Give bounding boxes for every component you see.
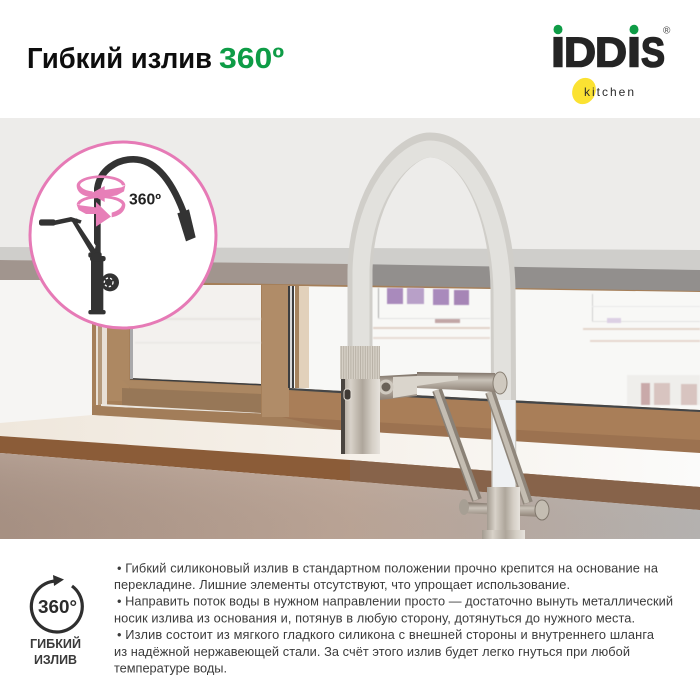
- icon: 360 flexible spout badge: [30, 575, 82, 667]
- faucet nozzle body: [341, 378, 380, 454]
- photo: kitchen window with faucet: [0, 118, 700, 539]
- embrasure: [96, 281, 107, 405]
- purple windows: [387, 288, 403, 304]
- logo wordmark: I: [551, 28, 565, 76]
- registered mark: ®: [663, 26, 671, 36]
- description text: носик излива из основания и, потянув в любую сторону, дотянуться до нужного места.: [114, 610, 635, 626]
- logo wordmark: D: [564, 28, 596, 76]
- right glass: [289, 286, 700, 410]
- distant buildings: [373, 288, 700, 405]
- circular arrow: [31, 581, 82, 632]
- right sash: [289, 388, 700, 412]
- description text: • Излив состоит из мягкого гладкого силикона с внешней стороны и внутреннего шланга: [117, 627, 655, 642]
- title: Гибкий излив: [27, 43, 212, 75]
- left sash: [107, 281, 129, 401]
- right building: [627, 375, 700, 405]
- logo wordmark: [551, 28, 665, 76]
- logo dot left: [554, 25, 562, 34]
- countertop: [0, 415, 700, 487]
- window frame wood: [92, 281, 700, 454]
- left glass: [130, 285, 261, 384]
- faucet base: [487, 487, 520, 531]
- mullion: [262, 285, 289, 417]
- nozzle knurled collar: [340, 346, 380, 379]
- arrow head: [53, 575, 64, 586]
- badge caption: [30, 636, 81, 667]
- pink rotation arrows: [77, 175, 125, 227]
- lower sash wood detail: [122, 380, 261, 394]
- description text: • Гибкий силиконовый излив в стандартном положении прочно крепится на основание на: [117, 560, 659, 576]
- description text: • Направить поток воды в нужном направлении просто — достаточно вынуть металлический: [117, 594, 673, 608]
- distant building left pane: [135, 318, 261, 344]
- logo dot right: [630, 25, 638, 34]
- logo: IDDIS kitchen: [551, 25, 671, 108]
- logo wordmark: I: [627, 28, 641, 76]
- description text: температуре воды.: [114, 660, 227, 676]
- base cabinet: [0, 453, 700, 539]
- faucet crossbar: [462, 502, 542, 517]
- callout: 360 degree faucet diagram: [30, 142, 216, 328]
- roller blind: [0, 118, 700, 293]
- photo bottom edge: [0, 539, 700, 700]
- sash highlight strip: [101, 404, 261, 416]
- logo wordmark: D: [595, 28, 627, 76]
- callout circle: [30, 142, 216, 328]
- faucet spout: [360, 145, 504, 490]
- black faucet body: [39, 217, 119, 314]
- 360 in badge: 360°: [38, 597, 77, 617]
- nozzle slot: [344, 389, 351, 400]
- description text: из надёжной нержавеющей стали. За счёт этого излив будет легко гнуться при любой: [114, 644, 630, 659]
- description text: [114, 560, 673, 676]
- kitchen label: kitchen: [584, 85, 634, 99]
- badge caption: ИЗЛИВ: [34, 652, 77, 667]
- 360 label: 360º: [129, 192, 161, 208]
- countertop wood edge: [0, 436, 700, 510]
- sill wood: [92, 406, 340, 431]
- logo wordmark: S: [641, 28, 665, 76]
- blind hem: [0, 260, 350, 286]
- blind lower band: [0, 247, 700, 270]
- building lines: [378, 288, 379, 318]
- faucet nozzle holder: [380, 374, 417, 400]
- black faucet hose: [97, 159, 196, 258]
- yellow blob: [568, 74, 600, 108]
- badge caption: ГИБКИЙ: [30, 636, 81, 651]
- faucet rear arm: [489, 392, 528, 503]
- description text: перекладине. Лишние элементы отсутствуют, что упрощает использование.: [114, 577, 570, 592]
- title: 360º: [219, 43, 284, 75]
- left wall: [0, 280, 93, 426]
- right sash jamb: [288, 286, 294, 388]
- faucet top bar: [417, 372, 495, 392]
- faucet front arm: [436, 390, 477, 500]
- faucet bar end cap: [493, 372, 507, 394]
